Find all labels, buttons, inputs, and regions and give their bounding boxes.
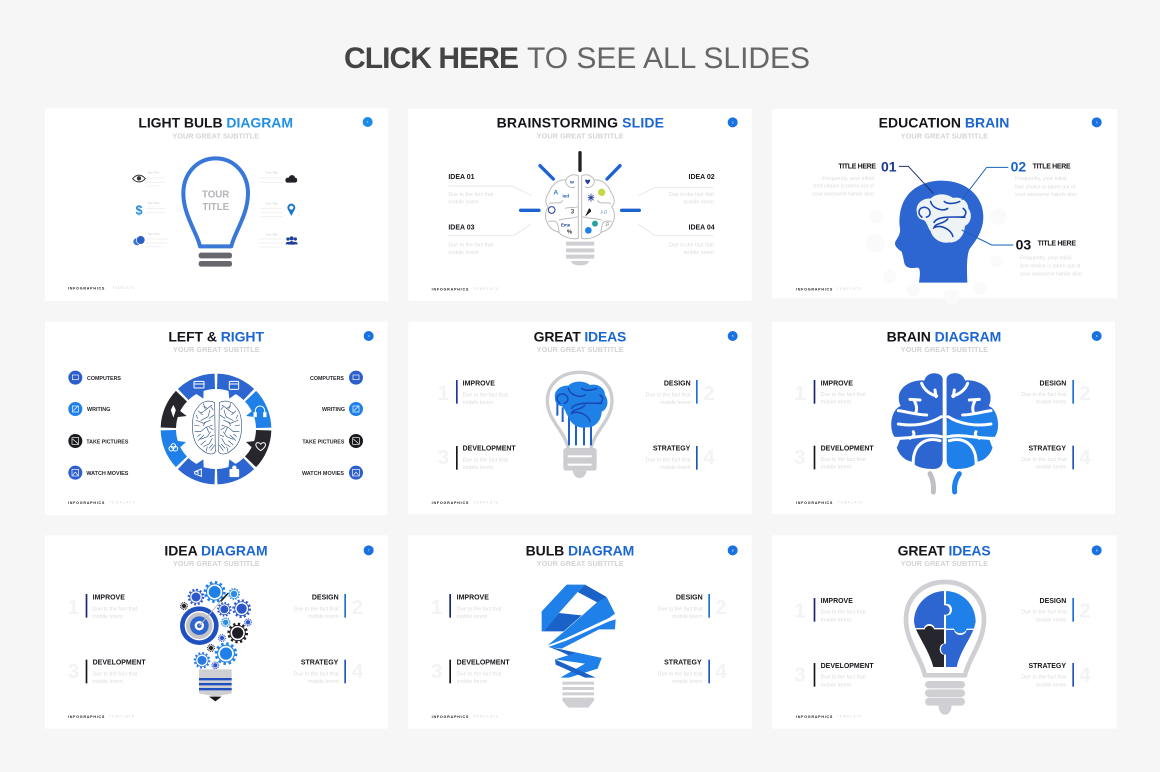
panel: education brain (772, 109, 1117, 305)
callout 01: Frequently, your initial (822, 176, 874, 182)
subtitle: YOUR GREAT SUBTITLE (901, 131, 988, 140)
item: development: DEVELOPMENT (93, 659, 146, 666)
heading: click here to see all slides (344, 42, 810, 75)
page badge (1092, 117, 1102, 127)
item: development: Due to the fact that (92, 671, 138, 677)
subtitle: YOUR GREAT SUBTITLE (172, 131, 259, 140)
page badge (728, 117, 738, 127)
item: improve: IMPROVE (821, 598, 853, 605)
small notes (147, 170, 278, 236)
small notes: Tour Title (147, 201, 160, 205)
right list: COMPUTERS (310, 376, 344, 382)
left list (68, 371, 129, 480)
idea 02: Due to the fact that (669, 192, 715, 198)
footer: INFOGRAPHICS (432, 715, 469, 719)
item: improve (68, 594, 138, 620)
icon: eye (133, 175, 145, 182)
item: strategy: mobile lorem (1036, 683, 1067, 689)
callout 01: font choice is taken out of (814, 184, 875, 190)
item: improve: Due to the fact that (821, 392, 866, 398)
bulb label: TOUR (202, 189, 230, 200)
idea 04: Due to the fact that (669, 242, 715, 248)
item: improve: Due to the fact that (463, 392, 508, 398)
item: strategy (1021, 445, 1091, 471)
item: improve: IMPROVE (93, 594, 125, 601)
brain doodles: % (567, 229, 572, 235)
footer (796, 501, 863, 505)
puzzle pieces (914, 591, 976, 667)
right hemisphere (947, 373, 998, 469)
page badge: 2 (732, 120, 734, 124)
footer (432, 715, 499, 719)
item: strategy: mobile lorem (672, 679, 703, 685)
idea 02: mobile lorem (683, 200, 715, 206)
item: strategy: Due to the fact that (658, 671, 703, 677)
icon: cloud (285, 175, 297, 183)
faint background doodles (866, 208, 1007, 305)
item: development: DEVELOPMENT (821, 445, 874, 452)
footer: INFOGRAPHICS (68, 715, 105, 719)
item: improve: mobile lorem (457, 614, 488, 620)
right list: WRITING (322, 407, 345, 413)
idea 01: IDEA 01 (448, 174, 475, 181)
footer: TEMPLATE (112, 286, 135, 290)
left list: COMPUTERS (87, 376, 121, 382)
segmented ring (149, 362, 283, 496)
brain doodles: ied (562, 194, 569, 199)
item: development: 3 (68, 660, 79, 683)
small notes: Tour Title (266, 232, 278, 236)
right list: WATCH MOVIES (302, 471, 344, 477)
page badge: 5 (732, 334, 734, 338)
item: development: mobile lorem (92, 679, 123, 685)
idea 03: mobile lorem (448, 250, 479, 256)
callout 02 (1011, 159, 1077, 198)
footer: INFOGRAPHICS (796, 287, 833, 291)
brain (555, 382, 607, 428)
item: design (646, 380, 715, 406)
page badge (363, 117, 373, 127)
item: design: 2 (352, 596, 363, 619)
item: improve: IMPROVE (463, 381, 495, 388)
footer: TEMPLATE (837, 287, 862, 291)
item: development (794, 663, 874, 689)
title: LEFT & RIGHT (168, 329, 264, 345)
item: strategy: mobile lorem (308, 679, 339, 685)
item: design: Due to the fact that (294, 606, 339, 612)
heading: click here to see all slides: CLICK HERE (344, 42, 519, 75)
leader lines (448, 186, 713, 236)
footer: INFOGRAPHICS (68, 501, 105, 505)
idea 03: Due to the fact that (448, 242, 494, 248)
item: design (658, 594, 727, 620)
left hemisphere (891, 373, 943, 469)
panel: idea diagram (45, 535, 388, 729)
page badge: 6 (1096, 334, 1098, 338)
item: improve: 1 (794, 600, 806, 623)
item: design: 2 (1079, 382, 1091, 405)
right list: TAKE PICTURES (302, 439, 345, 445)
subtitle: YOUR GREAT SUBTITLE (901, 559, 988, 568)
item: strategy: STRATEGY (664, 659, 702, 666)
item: improve: Due to the fact that (457, 606, 502, 612)
brain doodles: w (569, 180, 574, 186)
subtitle: YOUR GREAT SUBTITLE (173, 559, 260, 568)
callout 01: TITLE HERE (838, 163, 876, 170)
item: development: 3 (794, 446, 806, 469)
item: improve: 1 (794, 382, 806, 405)
title: LIGHT BULB DIAGRAM (138, 115, 293, 131)
bulb outline (547, 372, 612, 448)
footer: TEMPLATE (473, 715, 499, 719)
brain doodles: Eme (561, 222, 571, 227)
small notes: Tour Title (147, 232, 160, 236)
footer (68, 715, 135, 719)
page badge: 7 (368, 548, 370, 552)
item: strategy: 4 (352, 660, 364, 683)
item: strategy (658, 659, 727, 685)
page badge (364, 545, 374, 555)
item: development (68, 659, 146, 685)
callout 02: TITLE HERE (1033, 164, 1071, 171)
subtitle: YOUR GREAT SUBTITLE (537, 345, 624, 354)
circuit lines (557, 403, 591, 445)
item: design (1021, 380, 1091, 406)
footer: TEMPLATE (109, 501, 136, 505)
left list: TAKE PICTURES (86, 439, 129, 445)
title: EDUCATION BRAIN (879, 115, 1009, 131)
heading: click here to see all slides: TO SEE ALL SLIDES (527, 42, 810, 75)
footer: TEMPLATE (837, 715, 862, 719)
title: GREAT IDEAS (898, 543, 991, 559)
item: design: Due to the fact that (646, 392, 691, 398)
item: development: DEVELOPMENT (821, 663, 874, 670)
idea 03 (448, 224, 494, 256)
item: design: mobile lorem (672, 614, 703, 620)
item: design: DESIGN (664, 381, 691, 388)
right list (302, 371, 363, 480)
footer (796, 715, 862, 719)
page badge (1092, 331, 1102, 341)
item: development: Due to the fact that (821, 457, 866, 463)
callout 03 (1016, 236, 1082, 277)
callout 03: TITLE HERE (1038, 240, 1076, 247)
page badge: 1 (367, 120, 369, 124)
item: improve: IMPROVE (457, 594, 489, 601)
callout 01: your awesome hands also (812, 192, 874, 198)
small note lines (146, 178, 282, 247)
ring icons (169, 381, 266, 477)
title: BULB DIAGRAM (526, 543, 634, 559)
item: improve: Due to the fact that (92, 606, 138, 612)
item: design: DESIGN (1040, 380, 1066, 387)
brain doodles: ♫ (605, 222, 609, 228)
callout 02: your awesome hands also (1015, 192, 1077, 198)
bulb outline (183, 158, 248, 246)
item: design: mobile lorem (1036, 617, 1067, 623)
item: design: Due to the fact that (1021, 392, 1067, 398)
page badge (728, 545, 738, 555)
item: strategy: Due to the fact that (646, 457, 691, 463)
item: development (794, 445, 874, 471)
footer: TEMPLATE (109, 715, 135, 719)
footer (68, 501, 136, 505)
page badge (364, 331, 374, 341)
target with arrow (180, 593, 228, 645)
icon: dollar: $ (135, 204, 143, 218)
title: BRAIN DIAGRAM (887, 329, 1001, 345)
item: improve: Due to the fact that (821, 610, 866, 616)
item: improve (794, 380, 866, 406)
item: design: mobile lorem (308, 614, 339, 620)
page badge (728, 331, 738, 341)
page badge: 8 (732, 548, 734, 552)
callout 03: 03 (1016, 236, 1031, 252)
item: design: mobile lorem (1036, 400, 1067, 406)
callout 03: font choice is taken out of (1020, 264, 1081, 270)
title: GREAT IDEAS (534, 329, 626, 345)
item: development: 3 (431, 660, 442, 683)
item: strategy: Due to the fact that (1021, 457, 1067, 463)
item: strategy (646, 446, 715, 471)
head silhouette (895, 181, 983, 283)
item: improve (794, 598, 866, 623)
item: strategy: STRATEGY (653, 446, 691, 453)
callout 02: 02 (1011, 159, 1026, 175)
brain (917, 194, 971, 243)
item: improve: 1 (68, 596, 79, 619)
page badge: 3 (1096, 120, 1098, 124)
item: improve: 1 (438, 382, 449, 405)
panel: brainstorming slide (408, 109, 752, 301)
item: design: Due to the fact that (1021, 610, 1067, 616)
panel: bulb diagram (408, 535, 752, 729)
item: development: 3 (438, 446, 449, 469)
item: strategy: mobile lorem (1036, 465, 1067, 471)
item: development: DEVELOPMENT (463, 446, 516, 453)
item: improve: mobile lorem (821, 400, 852, 406)
item: strategy: 4 (1079, 664, 1091, 687)
footer (432, 287, 499, 291)
subtitle: YOUR GREAT SUBTITLE (537, 559, 624, 568)
item: improve: IMPROVE (821, 380, 853, 387)
item: design: DESIGN (676, 594, 703, 601)
item: development: Due to the fact that (821, 675, 866, 681)
brain doodles: ♪♫ (600, 210, 607, 216)
light rays (521, 153, 639, 210)
left list: WATCH MOVIES (86, 471, 129, 477)
item: design (294, 594, 363, 620)
footer: INFOGRAPHICS (796, 501, 833, 505)
leader lines (899, 166, 1013, 245)
brain doodles (548, 180, 609, 235)
callout 01: 01 (881, 159, 897, 175)
item: strategy: Due to the fact that (294, 671, 339, 677)
item: improve: mobile lorem (463, 400, 494, 406)
panel: light bulb diagram (45, 108, 388, 301)
item: design: 2 (715, 596, 727, 619)
idea 02 (669, 174, 715, 206)
item: development: DEVELOPMENT (457, 659, 510, 666)
footer: INFOGRAPHICS (68, 286, 105, 290)
item: strategy (1021, 663, 1091, 689)
item: development (438, 446, 516, 471)
footer: TEMPLATE (838, 501, 863, 505)
footer: TEMPLATE (473, 287, 499, 291)
bulb base (199, 669, 232, 701)
item: improve: 1 (431, 596, 442, 619)
bulb label: TITLE (202, 202, 229, 213)
item: development (431, 659, 510, 685)
item: strategy: Due to the fact that (1021, 675, 1067, 681)
bulb base (925, 681, 965, 715)
callout 03: your awesome hands also (1020, 271, 1082, 277)
subtitle: YOUR GREAT SUBTITLE (537, 131, 624, 140)
item: development: 3 (794, 664, 806, 687)
item: strategy: 4 (1079, 446, 1091, 469)
idea 01: Due to the fact that (448, 192, 494, 198)
item: development: mobile lorem (821, 683, 852, 689)
item: strategy: STRATEGY (1028, 445, 1066, 452)
page badge: 9 (1096, 548, 1098, 552)
footer: INFOGRAPHICS (796, 715, 833, 719)
item: design: DESIGN (1040, 598, 1066, 605)
left list: WRITING (87, 407, 110, 413)
panel: great ideas brain bulb (408, 322, 752, 514)
footer (68, 286, 135, 290)
brain stems (930, 474, 959, 492)
item: design: Due to the fact that (658, 606, 703, 612)
central brain (193, 401, 241, 454)
footer: INFOGRAPHICS (432, 287, 469, 291)
icon: people (286, 236, 298, 245)
item: design: 2 (703, 382, 715, 405)
idea 01: mobile lorem (448, 200, 479, 206)
bulb base (566, 242, 594, 265)
idea 04: mobile lorem (683, 250, 715, 256)
item: design: mobile lorem (660, 400, 691, 406)
small notes: Tour Title (266, 201, 278, 205)
callout 02: Frequently, your initial (1015, 176, 1067, 182)
item: strategy: STRATEGY (1028, 663, 1066, 670)
title: BRAINSTORMING SLIDE (497, 115, 664, 131)
panel: left and right (45, 322, 387, 515)
item: strategy: 4 (703, 446, 715, 469)
page badge (1092, 545, 1102, 555)
item: development: Due to the fact that (463, 457, 508, 463)
item: improve: mobile lorem (821, 617, 852, 623)
item: strategy: mobile lorem (660, 465, 691, 471)
item: development: mobile lorem (821, 465, 852, 471)
panel: great ideas puzzle bulb (772, 535, 1117, 729)
item: development: mobile lorem (457, 679, 488, 685)
item: development: Due to the fact that (457, 671, 502, 677)
callout 01 (812, 159, 897, 198)
footer (796, 287, 862, 291)
item: design: DESIGN (312, 594, 339, 601)
idea 02: IDEA 02 (689, 174, 715, 181)
small notes: Tour Title (147, 170, 160, 174)
gears (180, 582, 252, 669)
ring pointers (175, 389, 257, 469)
item: strategy (294, 659, 364, 685)
item: improve (431, 594, 502, 620)
bulb outline (906, 582, 984, 675)
item: improve (438, 380, 508, 406)
item: development: mobile lorem (463, 465, 494, 471)
item: strategy: 4 (715, 660, 727, 683)
brain doodles: A (553, 189, 558, 196)
bulb label (202, 189, 230, 213)
item: design (1021, 598, 1091, 623)
callout 03: Frequently, your initial (1020, 255, 1072, 261)
brain outline (545, 175, 615, 239)
idea 01 (448, 174, 494, 206)
idea 04: IDEA 04 (689, 224, 715, 231)
subtitle: YOUR GREAT SUBTITLE (173, 345, 260, 354)
item: strategy: STRATEGY (301, 659, 339, 666)
small notes: Tour Title (266, 170, 278, 174)
subtitle: YOUR GREAT SUBTITLE (901, 345, 988, 354)
item: improve: mobile lorem (92, 614, 123, 620)
idea 04 (669, 224, 715, 256)
footer (432, 501, 499, 505)
brain doodles: 3 (571, 209, 575, 216)
bulb base (562, 682, 594, 708)
icon: location pin (287, 204, 295, 216)
footer: INFOGRAPHICS (432, 501, 469, 505)
origami bulb (542, 585, 616, 678)
bulb base (563, 448, 597, 478)
item: design: 2 (1079, 600, 1091, 623)
panel: brain diagram (772, 322, 1115, 514)
icon: speech bubbles (133, 236, 145, 245)
bulb base (199, 253, 232, 267)
title: IDEA DIAGRAM (164, 543, 268, 559)
callout 02: font choice is taken out of (1015, 184, 1076, 190)
page badge: 4 (368, 334, 370, 338)
idea 03: IDEA 03 (448, 224, 475, 231)
footer: TEMPLATE (473, 501, 499, 505)
